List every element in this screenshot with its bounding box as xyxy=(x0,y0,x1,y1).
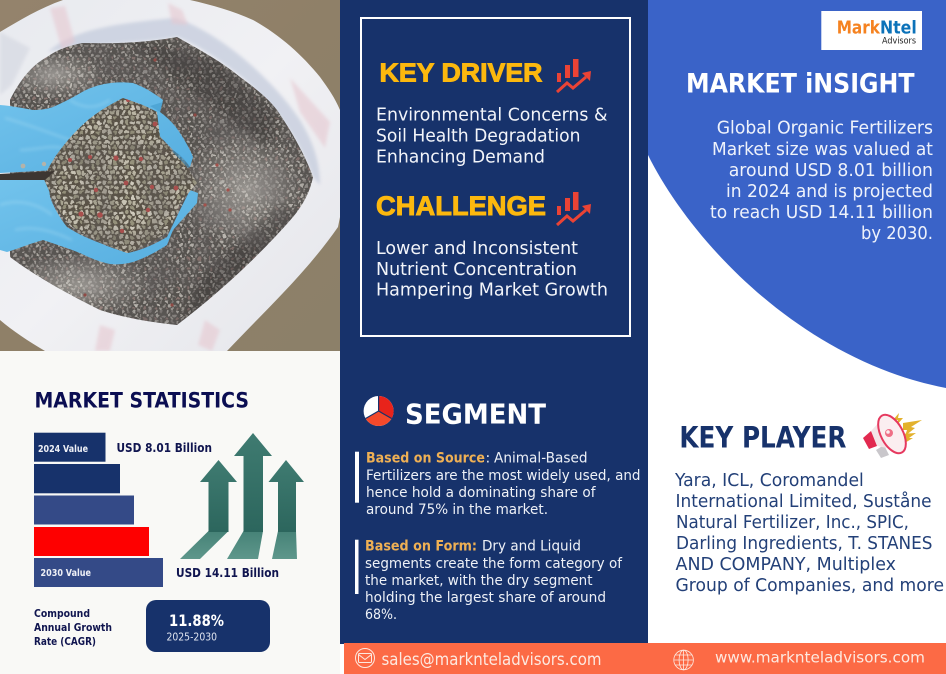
text: challenge description: Hampering Market Growth xyxy=(376,280,608,301)
text: website address: www.marknteladvisors.com xyxy=(715,649,925,667)
text: key player list: Yara, ICL, Coromandel xyxy=(674,470,864,491)
text: market insight description xyxy=(710,118,933,244)
text block: based on source: : xyxy=(486,451,490,467)
text: key driver description: Enhancing Demand xyxy=(376,147,545,168)
panel: market insight blue shape xyxy=(648,0,946,388)
text: key player list: Darling Ingredients, T. STANES xyxy=(676,533,932,554)
heading: market statistics: MARKET STATISTICS xyxy=(34,388,249,413)
panel: key driver and challenge box xyxy=(361,18,630,336)
text block: based on form xyxy=(355,539,623,623)
text block: based on source: Animal-Based xyxy=(494,451,588,467)
text: key player list: AND COMPANY, Multiplex xyxy=(676,554,896,575)
text: market insight description: in 2024 and is projected xyxy=(726,181,933,202)
bar chart: market value steps: 2024 Value xyxy=(38,444,88,455)
heading: key player: KEY PLAYER xyxy=(679,421,846,455)
label: 2024 value: USD 8.01 Billion xyxy=(116,441,212,455)
heading: challenge: CHALLENGE xyxy=(376,191,546,221)
text: market insight description: Market size was valued at xyxy=(712,139,933,160)
label: compound annual growth rate xyxy=(34,608,112,648)
icon: email xyxy=(356,648,374,668)
label: compound annual growth rate: Compound xyxy=(34,608,90,620)
text block: based on source xyxy=(355,451,640,518)
callout: CAGR value: 11.88% xyxy=(169,611,224,630)
heading: key driver: KEY DRIVER xyxy=(380,60,542,88)
icon: three growth arrows xyxy=(180,433,304,559)
callout: CAGR value: 2025-2030 xyxy=(166,632,217,644)
text block: based on form: holding the largest share of around xyxy=(365,590,606,606)
icon: globe xyxy=(674,650,693,670)
icon: megaphone xyxy=(863,410,922,458)
text: key player list: International Limited, Suståne xyxy=(676,491,932,512)
bar chart: market value steps xyxy=(34,433,163,587)
bar chart: market value steps: 2030 Value xyxy=(40,568,91,579)
text block: based on source: Fertilizers are the most widely used, and xyxy=(366,468,640,484)
logo: MarkNtel Advisors: Ntel xyxy=(880,17,917,38)
panel: footer bar xyxy=(344,643,946,674)
panel: fertilizer photo xyxy=(0,0,340,351)
label: compound annual growth rate: Annual Growth xyxy=(34,622,112,634)
text: key player list: Natural Fertilizer, Inc., SPIC, xyxy=(676,512,909,533)
icon: red trend chart xyxy=(557,192,591,225)
text block: based on source: Based on Source xyxy=(366,451,485,467)
callout: CAGR value xyxy=(146,600,270,652)
logo: MarkNtel Advisors: Advisors xyxy=(882,36,916,46)
text: key player list xyxy=(674,470,944,596)
text block: based on source: hence hold a dominating share of xyxy=(366,485,597,501)
text block: based on form: Dry and Liquid xyxy=(482,539,581,555)
text: challenge description: Lower and Inconsistent xyxy=(376,238,578,259)
text: key driver description: Soil Health Degradation xyxy=(376,126,580,146)
text: market insight description: by 2030. xyxy=(861,223,933,244)
text block: based on form: segments create the form category of xyxy=(365,556,623,572)
text: challenge description xyxy=(376,238,608,301)
text block: based on form: the market, with the dry segment xyxy=(365,573,593,589)
text: market insight description: around USD 8.01 billion xyxy=(729,160,933,181)
label: 2030 value: USD 14.11 Billion xyxy=(176,565,279,580)
logo: MarkNtel Advisors: Mark xyxy=(837,17,881,38)
text: market insight description: to reach USD 14.11 billion xyxy=(710,202,933,223)
panel: navy centre column xyxy=(340,0,648,644)
heading: segment: SEGMENT xyxy=(405,397,546,430)
logo: MarkNtel Advisors xyxy=(821,11,922,50)
text block: based on form: Based on Form: xyxy=(365,539,477,555)
text block: based on source: around 75% in the market. xyxy=(366,502,548,518)
icon: segment pie chart xyxy=(364,396,394,426)
text: challenge description: Nutrient Concentration xyxy=(376,259,577,280)
text: key driver description: Environmental Concerns & xyxy=(376,105,608,126)
text: email address: sales@marknteladvisors.com xyxy=(382,650,602,669)
text: key driver description xyxy=(376,105,608,168)
panel: market statistics background xyxy=(0,351,340,674)
text: market insight description: Global Organic Fertilizers xyxy=(717,118,933,138)
heading: market insight: MARKET iNSIGHT xyxy=(686,69,914,100)
text block: based on form: 68%. xyxy=(365,607,397,623)
label: compound annual growth rate: Rate (CAGR) xyxy=(34,636,96,648)
icon: red trend chart xyxy=(557,59,591,92)
